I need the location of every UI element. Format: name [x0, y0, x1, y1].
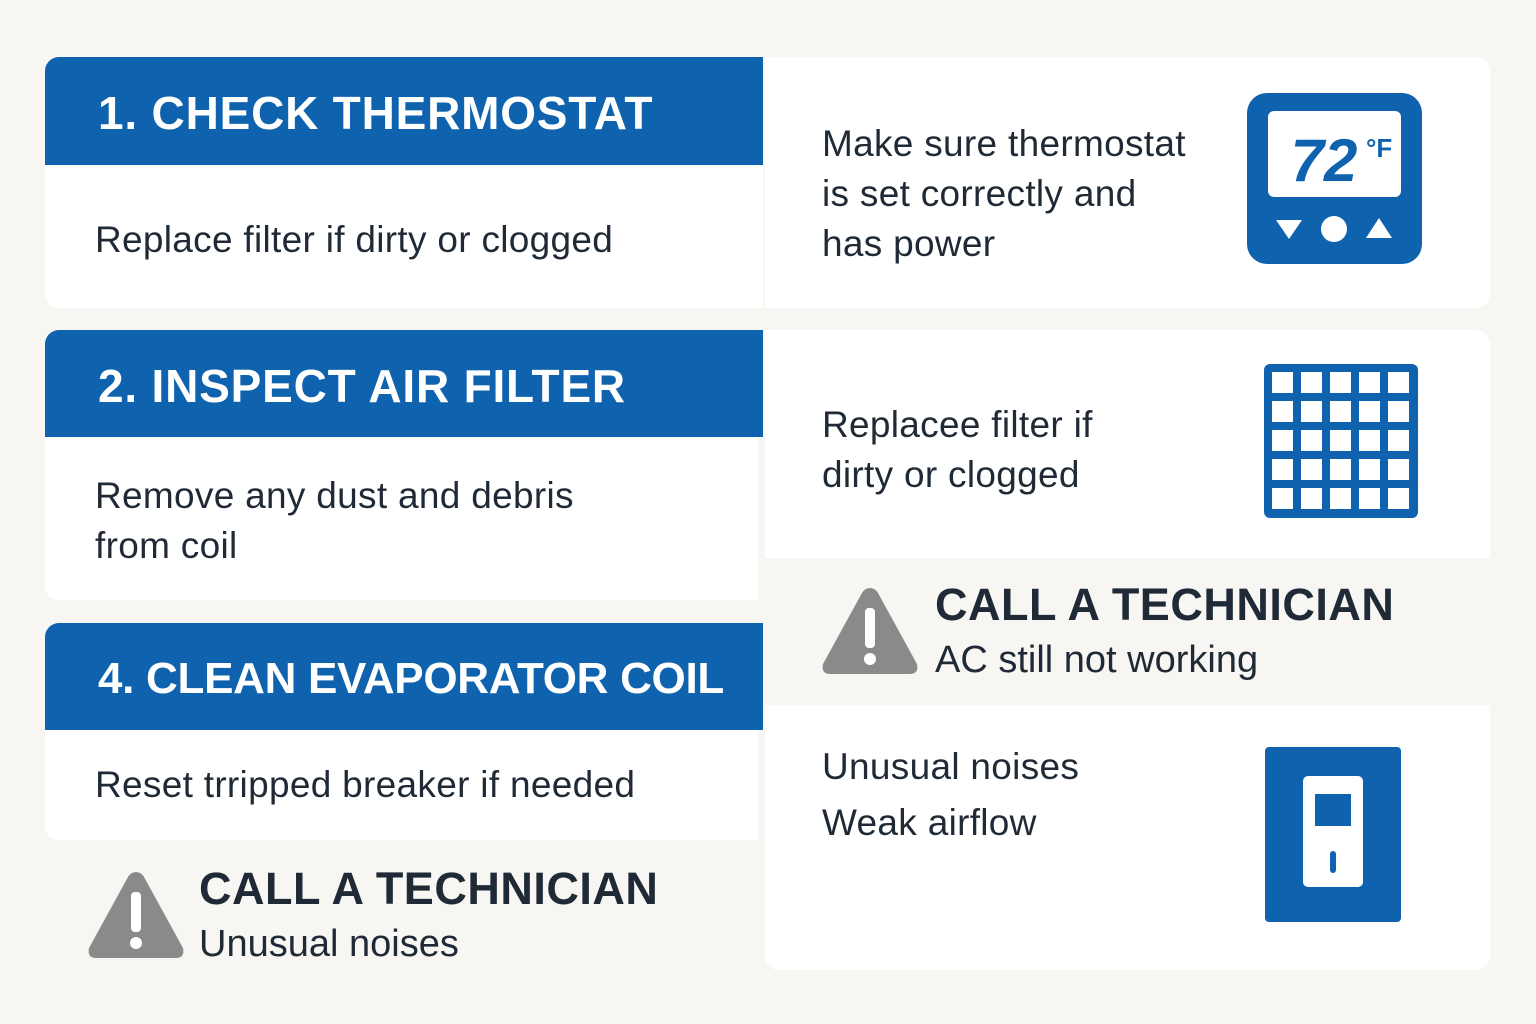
heading: 4. clean evaporator coil [45, 623, 763, 730]
panel: symptoms [765, 705, 1490, 970]
text: call a technician, AC still not working: CALL A TECHNICIAN [935, 579, 1394, 630]
text: symptoms list: Weak airflow [822, 802, 1037, 843]
icon: thermostat: 72 [1291, 127, 1357, 194]
text: thermostat instructions: has power [822, 223, 995, 264]
text: replace filter: Replace filter if dirty or clogged [95, 219, 613, 260]
heading: 2. inspect air filter: 2. INSPECT AIR FILTER [98, 360, 626, 412]
icon: air filter grid [1264, 364, 1418, 518]
heading: 1. check thermostat: 1. CHECK THERMOSTAT [98, 87, 653, 139]
icon: thermostat: °F [1366, 133, 1392, 163]
text: call a technician, AC still not working: AC still not working [935, 639, 1258, 681]
text: thermostat instructions: Make sure thermostat [822, 123, 1186, 164]
icon: wall switch [1265, 747, 1401, 922]
text: remove dust: Remove any dust and debris [95, 475, 574, 516]
text: replace filter: Replacee filter if [822, 404, 1093, 445]
text: thermostat instructions [822, 123, 1186, 264]
heading: 4. clean evaporator coil: 4. CLEAN EVAPORATOR COIL [98, 654, 724, 703]
text: symptoms list: Unusual noises [822, 746, 1079, 787]
text: remove dust [95, 475, 574, 566]
text: reset breaker: Reset trripped breaker if needed [95, 764, 635, 805]
heading: 1. check thermostat [45, 57, 763, 165]
callout: call a technician (left) [88, 863, 658, 965]
icon: warning [822, 588, 918, 674]
panel: filter description [765, 330, 1490, 558]
panel: check thermostat [45, 57, 763, 308]
text: call a technician, unusual noises [199, 863, 658, 965]
text: call a technician, AC still not working [935, 579, 1394, 681]
panel: thermostat description [765, 57, 1490, 308]
icon: warning [88, 872, 184, 958]
text: replace filter: dirty or clogged [822, 454, 1080, 495]
text: call a technician, unusual noises: Unusual noises [199, 923, 459, 965]
text: thermostat instructions: is set correctly and [822, 173, 1136, 214]
callout: call a technician (right) [822, 579, 1394, 681]
text: replace filter [822, 404, 1093, 495]
text: call a technician, unusual noises: CALL A TECHNICIAN [199, 863, 658, 914]
text: remove dust: from coil [95, 525, 238, 566]
panel: clean evaporator coil [45, 623, 758, 840]
heading: 2. inspect air filter [45, 330, 763, 437]
icon: thermostat [1247, 93, 1422, 264]
panel: inspect air filter [45, 330, 758, 600]
text: symptoms list [822, 746, 1079, 843]
